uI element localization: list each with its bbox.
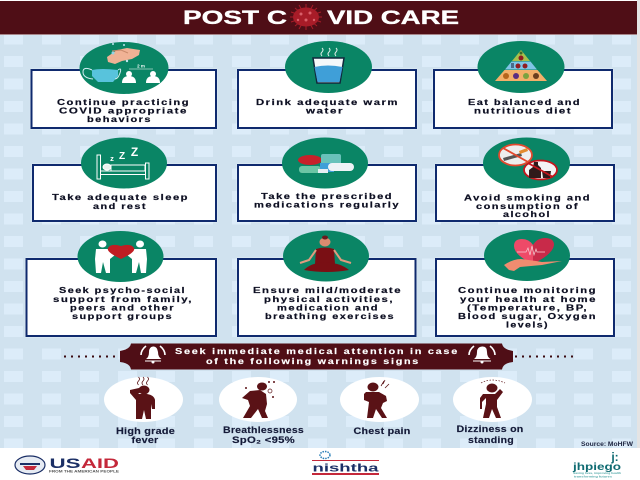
icon: virus xyxy=(290,4,322,30)
text: consumption of xyxy=(476,202,579,211)
logo: USAID: FROM THE AMERICAN PEOPLE xyxy=(49,470,120,474)
icon: pills xyxy=(282,138,368,188)
text xyxy=(256,98,399,116)
dotted line right xyxy=(515,356,573,358)
logo: jhpiego xyxy=(572,450,621,478)
logo: jhpiego: Saving lives, improving health xyxy=(573,471,621,475)
label: SpO₂ <95% xyxy=(232,435,295,445)
logo: nishtha xyxy=(312,452,380,475)
panel: balanced diet xyxy=(434,41,612,128)
icon: no smoking and no alcohol xyxy=(483,138,570,188)
text: support from family, xyxy=(53,295,193,304)
text xyxy=(458,286,597,330)
text: Ensure mild/moderate xyxy=(253,286,402,295)
icon: bell right xyxy=(469,346,495,364)
text: Eat balanced and xyxy=(468,98,581,107)
label: Chest pain xyxy=(354,426,410,436)
text xyxy=(253,286,402,321)
text: behaviors xyxy=(87,115,152,124)
dotted line left xyxy=(64,356,119,358)
logo: USAID xyxy=(15,455,120,474)
icon: bed and zzz: Z xyxy=(131,145,138,159)
label: standing xyxy=(468,435,514,445)
logo: USAID: AID xyxy=(81,455,119,471)
label: fever xyxy=(132,435,159,445)
text: medications regularly xyxy=(254,200,400,210)
icon: bed and zzz: Z xyxy=(119,151,125,162)
footer xyxy=(0,448,640,480)
text: Drink adequate warm xyxy=(256,98,399,107)
header banner xyxy=(0,1,637,34)
warning: dizziness xyxy=(453,377,532,445)
text: breathing exercises xyxy=(265,312,395,321)
icon: bed and zzz: z xyxy=(110,154,114,163)
text xyxy=(468,98,581,116)
text: and rest xyxy=(93,202,147,211)
text: support groups xyxy=(72,312,173,321)
panel: physical activities xyxy=(238,230,416,336)
text xyxy=(254,192,400,210)
logo: jhpiego: jhpiego xyxy=(572,462,621,473)
logo: nishtha: nishtha xyxy=(312,462,380,474)
warning: high grade fever xyxy=(104,377,183,445)
text: Take adequate sleep xyxy=(52,193,189,202)
icon: two people holding a heart xyxy=(78,231,164,282)
text xyxy=(53,286,193,321)
label xyxy=(456,424,524,445)
panel: avoid smoking and alcohol xyxy=(436,138,614,221)
text xyxy=(57,98,190,124)
icon: glass of water xyxy=(285,41,372,93)
panel: warm water xyxy=(238,41,416,128)
panel: psycho-social support xyxy=(26,231,216,336)
icon: person gasping xyxy=(242,381,275,418)
icon: bed and zzz xyxy=(81,138,167,188)
text: levels) xyxy=(506,320,549,330)
text xyxy=(52,193,189,211)
text: Take the prescribed xyxy=(261,192,393,201)
text: physical activities, xyxy=(264,295,394,304)
label: Breathlessness xyxy=(223,425,304,435)
text: peers and other xyxy=(70,304,175,312)
warning: chest pain xyxy=(340,377,419,436)
panel: medications xyxy=(238,138,416,221)
icon: hand washing, mask and distancing xyxy=(80,42,168,94)
warning: breathlessness xyxy=(219,377,304,445)
text: your health at home xyxy=(460,295,597,304)
text xyxy=(464,194,591,219)
text: alcohol xyxy=(503,210,551,219)
panel: sleep xyxy=(33,138,216,221)
label xyxy=(116,426,175,445)
text: Seek psycho-social xyxy=(59,286,186,295)
panel: COVID appropriate behaviors xyxy=(32,42,216,128)
text: medication and xyxy=(277,304,379,312)
icon: person with fever xyxy=(130,377,155,419)
title: POST C xyxy=(183,8,287,29)
text: nutritious diet xyxy=(474,106,572,116)
icon: dizzy person xyxy=(480,380,505,418)
text: Avoid smoking and xyxy=(464,194,591,202)
icon: food pyramid xyxy=(478,41,564,93)
banner text: Seek immediate medical attention in case xyxy=(175,347,459,356)
logo: USAID: US xyxy=(50,455,80,471)
text: Continue monitoring xyxy=(458,286,597,295)
text: (Temperature, BP, xyxy=(467,304,588,312)
icon: heart on a hand xyxy=(484,230,570,281)
icon: person holding chest xyxy=(364,380,389,418)
icon: meditating woman xyxy=(283,230,369,282)
label xyxy=(223,425,304,445)
text: COVID appropriate xyxy=(59,106,188,116)
warning banner xyxy=(120,344,513,370)
logo: jhpiego: j: xyxy=(610,450,619,464)
text: water xyxy=(305,106,344,116)
icon: hand washing, mask and distancing: 2 m xyxy=(137,64,145,68)
label: Dizziness on xyxy=(456,424,524,434)
header banner: VID CARE xyxy=(327,8,459,29)
panel: health monitoring xyxy=(436,230,614,336)
label: High grade xyxy=(116,426,175,436)
source note: Source: MoHFW xyxy=(581,442,633,448)
banner text xyxy=(175,347,459,366)
text: Blood sugar, Oxygen xyxy=(458,312,597,321)
logo: jhpiego: transforming futures xyxy=(574,474,612,478)
text: Continue practicing xyxy=(57,98,190,107)
banner text: of the following warnings signs xyxy=(206,357,420,366)
icon: bell left xyxy=(141,346,165,364)
